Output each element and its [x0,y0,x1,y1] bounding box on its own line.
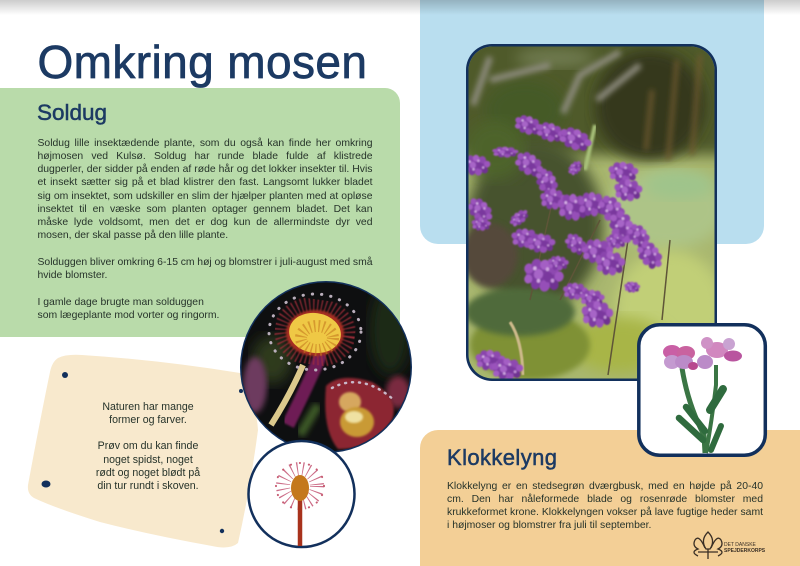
title: Omkring mosen [38,36,367,88]
logo text: SPEJDERKORPS [724,548,765,554]
illustration: round sundew drawing [248,441,354,547]
text block: activity prompt [96,400,200,492]
text block: activity prompt: rødt og noget blødt på [96,467,200,479]
text block: soldug body: Soldug lille insektædende plante, som du også kan finde her omkring [38,138,372,148]
panel: orange klokkelyng background [420,430,800,566]
text block: klokkelyng body: cm. Den har nåleformede blade og rosenrøde blomster med [447,494,763,505]
text block: soldug body: Solduggen bliver omkring 6-15 cm høj og blomstrer i juli-august med små [38,257,372,268]
panel: blue backdrop [420,0,764,244]
text block: klokkelyng body: krukkeformet krone. Klokkelyngen vokser på lave fugtige heder samt [447,507,763,518]
text block: soldug body: et insekt sætter sig på et blad klistrer den fast. Langsomt lukker bladet [38,177,372,188]
text block: klokkelyng body [447,480,763,531]
panel: green soldug background [0,88,400,337]
photo: heather in bog [466,44,717,381]
text block: klokkelyng body: Klokkelyng er en stedsegrøn dværgbusk, med en højde på 20-40 [447,480,763,492]
text block: activity prompt: din tur rundt i skoven. [97,480,199,492]
text block: soldug body: mosen, der skal passe på den lille plante. [38,230,228,241]
photo: round sundew close-up [240,281,412,453]
icon: scout fleur-de-lis logo [694,532,722,559]
text block: klokkelyng body: i højmoser og blomstrer fra juli til september. [447,520,651,531]
text block: soldug body: insektet til en væske som planten optager gennem bladet. Det kan [38,204,372,215]
illustration: heather inset [639,325,765,455]
text block: activity prompt: noget spidst, noget [103,454,193,466]
heading: Klokkelyng: Klokkelyng [447,445,557,470]
top shadow strip [0,0,800,15]
text block: soldug body: sig om insektet, som udskiller en slim der hjælper planten med at opløse [38,190,372,202]
text block: soldug body [38,138,373,321]
logo text: DET DANSKE [724,542,756,548]
heading: Soldug: Soldug [37,100,107,125]
text block: soldug body: måske lyde voldsomt, men det er dog kun de allermindste dyr ved [38,217,372,228]
text block: activity prompt: Prøv om du kan finde [98,440,198,452]
text block: soldug body: dugperler, der sidder på enden af røde hår og det lokker insekter til. Hvis [38,164,372,175]
text block: soldug body: hvide blomster. [38,270,107,281]
panel: beige activity blob [28,355,258,547]
logo text [724,542,765,554]
text block: soldug body: I gamle dage brugte man solduggen [38,296,204,308]
text block: activity prompt: former og farver. [109,414,187,426]
text block: soldug body: højmosen ved Kulsø. Soldug har runde blade fulde af klistrede [38,151,372,162]
text block: activity prompt: Naturen har mange [102,400,194,412]
text block: soldug body: som lægeplante mod vorter og ringorm. [38,310,219,321]
